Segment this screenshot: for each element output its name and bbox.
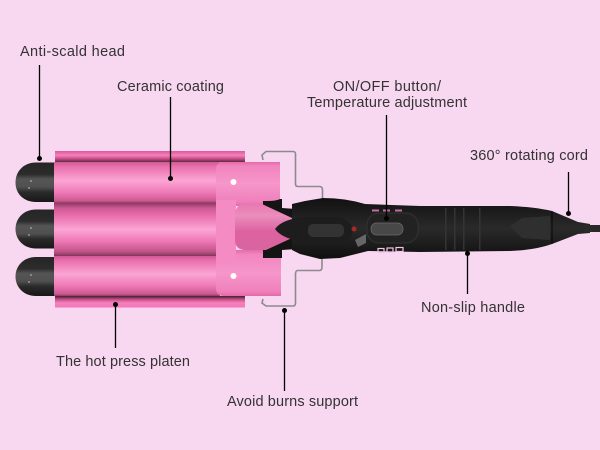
white rivets [230, 179, 236, 279]
label: anti-scald head: Anti-scald head [20, 44, 125, 60]
leader: ceramic coating [168, 97, 173, 181]
label: on/off button and temperature adjustment: Temperature adjustment [307, 95, 467, 111]
wire support stand [262, 152, 322, 306]
label: ceramic coating: Ceramic coating [117, 79, 224, 95]
barrel middle [54, 203, 220, 256]
handle neck behind collar [262, 199, 296, 258]
label: hot press platen: The hot press platen [56, 354, 190, 370]
facet on rear grip [510, 216, 550, 240]
ON/OFF button [371, 223, 403, 235]
cord [584, 225, 600, 232]
handle [275, 198, 600, 259]
center pink cap [235, 204, 292, 250]
leader: anti-scald head [37, 65, 42, 161]
cone separator [551, 211, 553, 244]
button panel [367, 213, 418, 243]
leader: non-slip handle [465, 251, 470, 294]
hot press platen top [55, 151, 245, 162]
label: rotating cord: 360° rotating cord [470, 148, 588, 164]
tip bottom [16, 257, 54, 296]
handle ribs [445, 208, 480, 250]
leader: burns support [282, 308, 287, 391]
leader: on/off button [384, 115, 389, 221]
logo marks [378, 248, 403, 252]
collar bottom lobe [216, 250, 281, 296]
power indicator [352, 226, 356, 232]
trigger grip [308, 224, 344, 237]
label: on/off button and temperature adjustment: ON/OFF button/ [333, 79, 442, 95]
leader: platen [113, 302, 118, 348]
tip highlights [28, 180, 32, 283]
hot press platen bottom [55, 296, 245, 308]
tip top [16, 162, 54, 202]
label: avoid burns support: Avoid burns support [227, 394, 358, 410]
leader: rotating cord [566, 172, 571, 216]
tip middle [16, 210, 54, 248]
barrel bottom [54, 256, 220, 296]
label: on/off button and temperature adjustment [307, 79, 467, 111]
trigger clamp [275, 217, 353, 243]
collar top lobe [216, 162, 280, 206]
panel indicator dots [372, 210, 402, 212]
curling iron: barrels and plates [16, 151, 245, 308]
barrel top [54, 162, 220, 203]
label: non-slip handle: Non-slip handle [421, 300, 525, 316]
collar center [216, 200, 236, 260]
facet near button [355, 234, 366, 247]
